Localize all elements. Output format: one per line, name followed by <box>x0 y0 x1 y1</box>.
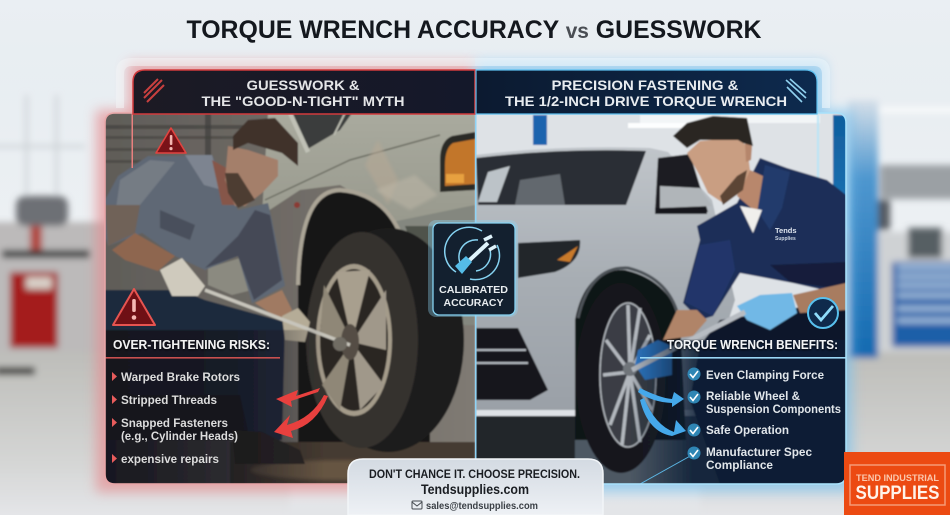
man: forearms <box>663 310 707 340</box>
man: gloves <box>160 258 205 296</box>
headlight <box>518 240 580 278</box>
list: benefits: Suspension Components <box>706 404 841 416</box>
badge: calibrated accuracy: ACCURACY <box>444 297 504 309</box>
man: wrench <box>205 290 350 345</box>
man: t-shirt <box>740 206 762 233</box>
red arrows <box>274 388 328 438</box>
icon: envelope <box>412 501 422 509</box>
side window <box>655 154 708 212</box>
man: neck <box>737 170 763 213</box>
panel glows <box>96 58 852 492</box>
man: boot <box>232 430 305 464</box>
title: TORQUE WRENCH ACCURACY vs GUESSWORK <box>186 16 762 44</box>
man: right arm <box>255 290 292 321</box>
floor <box>574 416 720 484</box>
panel: guesswork photo <box>105 113 475 484</box>
list: risks: expensive repairs <box>121 454 219 466</box>
list: benefits: Reliable Wheel & <box>706 391 800 403</box>
floor <box>230 442 475 484</box>
list: benefits: Safe Operation <box>706 425 789 437</box>
man: body <box>683 158 846 320</box>
man: forearm <box>112 233 175 271</box>
icon: small warning triangle <box>156 128 186 153</box>
list: benefits: Even Clamping Force <box>706 370 824 382</box>
header: precision <box>476 70 817 114</box>
list: risks: Warped Brake Rotors <box>121 372 240 384</box>
heading: benefits: TORQUE WRENCH BENEFITS: <box>667 338 838 352</box>
list: risks: Stripped Threads <box>121 395 217 407</box>
gloves <box>737 293 797 330</box>
name on shirt: Tends <box>775 226 797 235</box>
risks overlay <box>105 330 325 484</box>
icon: wrench in rings <box>445 227 499 280</box>
blue arrows <box>638 388 686 436</box>
header: precision: PRECISION FASTENING & <box>552 77 738 93</box>
wheel arch <box>575 270 686 440</box>
man: legs <box>105 290 285 440</box>
panel borders <box>105 113 846 484</box>
heading: risks: OVER-TIGHTENING RISKS: <box>113 338 270 352</box>
wheel arch <box>298 192 430 445</box>
rim <box>600 303 656 447</box>
icon: large warning triangle <box>113 289 155 325</box>
tire <box>576 283 666 473</box>
tire <box>368 228 464 452</box>
man: lower body <box>690 300 846 484</box>
panel: precision photo <box>475 113 846 484</box>
rim <box>316 264 392 416</box>
windshield <box>476 150 646 205</box>
header: guesswork: THE "GOOD-N-TIGHT" MYTH <box>202 93 404 109</box>
list: benefits: Manufacturer Spec <box>706 447 813 459</box>
headlight <box>440 132 475 192</box>
name on shirt <box>775 226 797 242</box>
bumper <box>392 205 475 325</box>
man: shirt <box>105 155 285 303</box>
header: guesswork: GUESSWORK & <box>246 77 360 93</box>
man: face <box>687 138 750 203</box>
icon: large check circle <box>808 298 838 328</box>
footer callout: sales@tendsupplies.com <box>426 501 538 512</box>
badge: calibrated accuracy: CALIBRATED <box>439 284 508 296</box>
badge: calibrated accuracy <box>428 220 518 317</box>
wrench <box>632 312 745 370</box>
footer callout: Tendsupplies.com <box>421 482 529 497</box>
man: neck <box>212 160 235 206</box>
list: risks: Snapped Fasteners <box>121 418 228 430</box>
man: hair <box>673 116 753 148</box>
logo: TEND INDUSTRIAL <box>856 473 939 484</box>
gap behind arm <box>208 258 252 295</box>
car body <box>475 147 735 410</box>
header: precision: THE 1/2-INCH DRIVE TORQUE WRENCH <box>505 93 787 109</box>
grille <box>476 328 548 400</box>
list: benefits <box>688 368 841 472</box>
man: hair <box>233 118 298 166</box>
list: benefits: Compliance <box>706 460 773 472</box>
benefits overlay <box>630 340 846 484</box>
footer callout: DON'T CHANCE IT. CHOOSE PRECISION. <box>369 469 580 481</box>
name on shirt: Supplies <box>775 236 796 242</box>
footer callout <box>348 459 603 515</box>
header: guesswork <box>133 70 475 114</box>
car body <box>262 114 475 222</box>
logo <box>844 452 950 515</box>
logo: SUPPLIES <box>856 483 940 504</box>
man: face <box>225 146 278 206</box>
list: risks <box>112 372 240 466</box>
list: risks: (e.g., Cylinder Heads) <box>121 431 238 443</box>
